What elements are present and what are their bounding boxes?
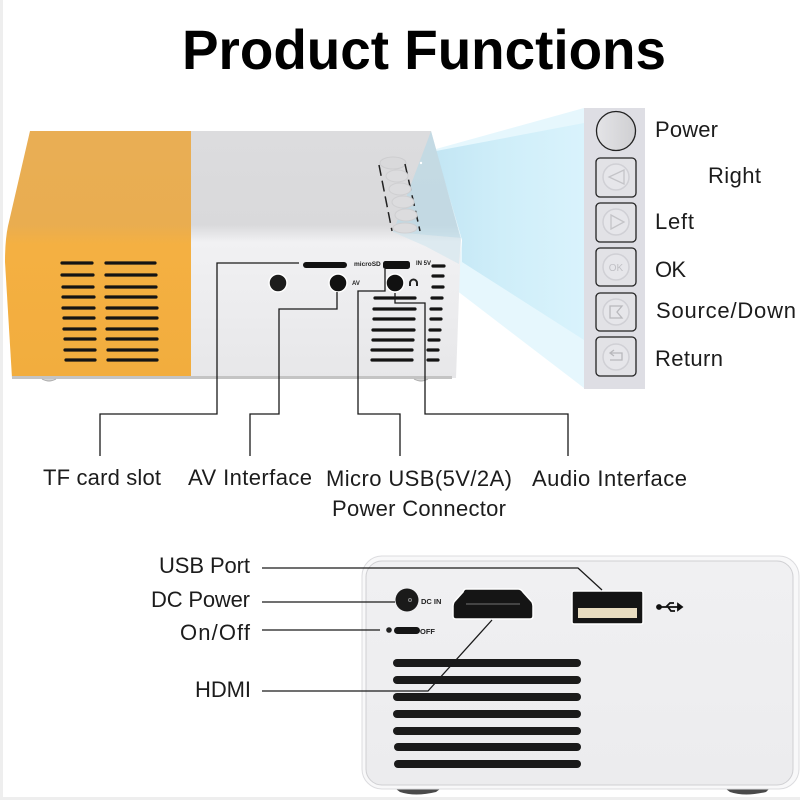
rear port labels: HDMI xyxy=(195,677,251,702)
orange shell vents xyxy=(62,263,157,360)
ok button xyxy=(596,248,636,286)
right button xyxy=(596,158,636,197)
dc in port xyxy=(396,588,441,612)
rear feet xyxy=(392,786,772,794)
rear port labels xyxy=(151,553,251,702)
hdmi port xyxy=(453,589,533,619)
white body xyxy=(12,131,461,381)
port labels: AV Interface xyxy=(188,465,312,490)
button labels xyxy=(655,117,796,371)
button labels: Left xyxy=(655,209,694,234)
ports and vents xyxy=(269,261,444,360)
ok button: OK xyxy=(609,263,624,274)
orange shell xyxy=(5,131,191,378)
rear port labels: DC Power xyxy=(151,587,250,612)
rear port labels: On/Off xyxy=(180,620,251,645)
projector rear view xyxy=(362,556,799,794)
title: Product Functions xyxy=(182,18,666,81)
on off switch: OFF xyxy=(420,627,435,636)
button labels: Power xyxy=(655,117,718,142)
port labels: Audio Interface xyxy=(532,466,687,491)
button labels: Source/Down xyxy=(656,298,796,323)
button labels: Return xyxy=(655,346,723,371)
rear vents xyxy=(393,659,581,768)
usb symbol xyxy=(657,603,682,611)
port labels: Micro USB(5V/2A) xyxy=(326,466,512,491)
on off switch xyxy=(386,627,435,636)
projector light beam xyxy=(436,108,584,388)
power button xyxy=(596,112,636,150)
rear port labels: USB Port xyxy=(159,553,250,578)
port labels: Power Connector xyxy=(332,496,506,521)
dc in port: DC IN xyxy=(421,597,441,606)
port labels xyxy=(43,465,687,521)
return button xyxy=(596,337,636,376)
ports and vents: AV xyxy=(352,281,360,287)
ports and vents: microSD xyxy=(354,261,381,268)
control panel xyxy=(584,108,645,389)
button labels: Right xyxy=(708,163,761,188)
top buttons xyxy=(379,157,422,233)
left button xyxy=(596,203,636,242)
projector top view xyxy=(5,131,461,381)
source down button xyxy=(596,293,636,331)
leader lines: top ports xyxy=(100,263,568,456)
ports and vents: IN 5V xyxy=(416,261,431,267)
button labels: OK xyxy=(655,257,686,282)
usb port xyxy=(572,591,643,624)
port labels: TF card slot xyxy=(43,465,161,490)
leader lines: rear ports xyxy=(262,568,602,691)
